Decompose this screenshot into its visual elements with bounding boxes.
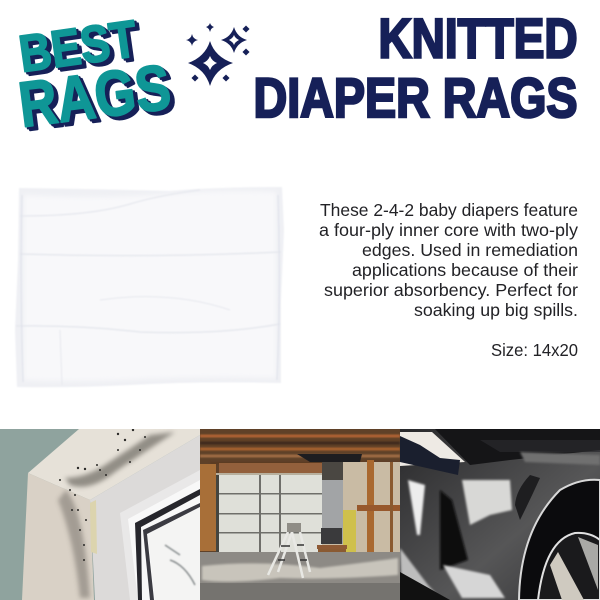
logo word: RAGS: RAGS bbox=[17, 52, 177, 143]
logo word: BEST: BEST bbox=[18, 12, 143, 86]
logo word: RAGS: RAGS bbox=[19, 54, 179, 144]
product photo: white rag bbox=[15, 187, 284, 387]
photo: glossy car bbox=[400, 429, 600, 600]
description text: superior absorbency. Perfect for bbox=[324, 280, 578, 300]
logo: Best Rags bbox=[15, 9, 179, 145]
photo: gutted garage bbox=[200, 429, 400, 600]
logo word: BEST: BEST bbox=[16, 10, 141, 84]
size text: Size: 14x20 bbox=[491, 340, 578, 360]
car wheel bbox=[519, 480, 600, 600]
photo: moldy window frame bbox=[0, 429, 200, 600]
ladder bbox=[268, 523, 310, 578]
description text: applications because of their bbox=[352, 260, 578, 280]
description text: These 2-4-2 baby diapers feature bbox=[320, 200, 578, 220]
description text bbox=[319, 200, 578, 360]
logo word: RAGS: RAGS bbox=[15, 50, 175, 141]
icon: sparkles bbox=[186, 23, 250, 86]
logo word: BEST: BEST bbox=[20, 13, 145, 87]
description text: soaking up big spills. bbox=[414, 300, 578, 320]
description text: a four-ply inner core with two-ply bbox=[319, 220, 578, 240]
title bbox=[254, 6, 578, 129]
description text: edges. Used in remediation bbox=[362, 240, 578, 260]
